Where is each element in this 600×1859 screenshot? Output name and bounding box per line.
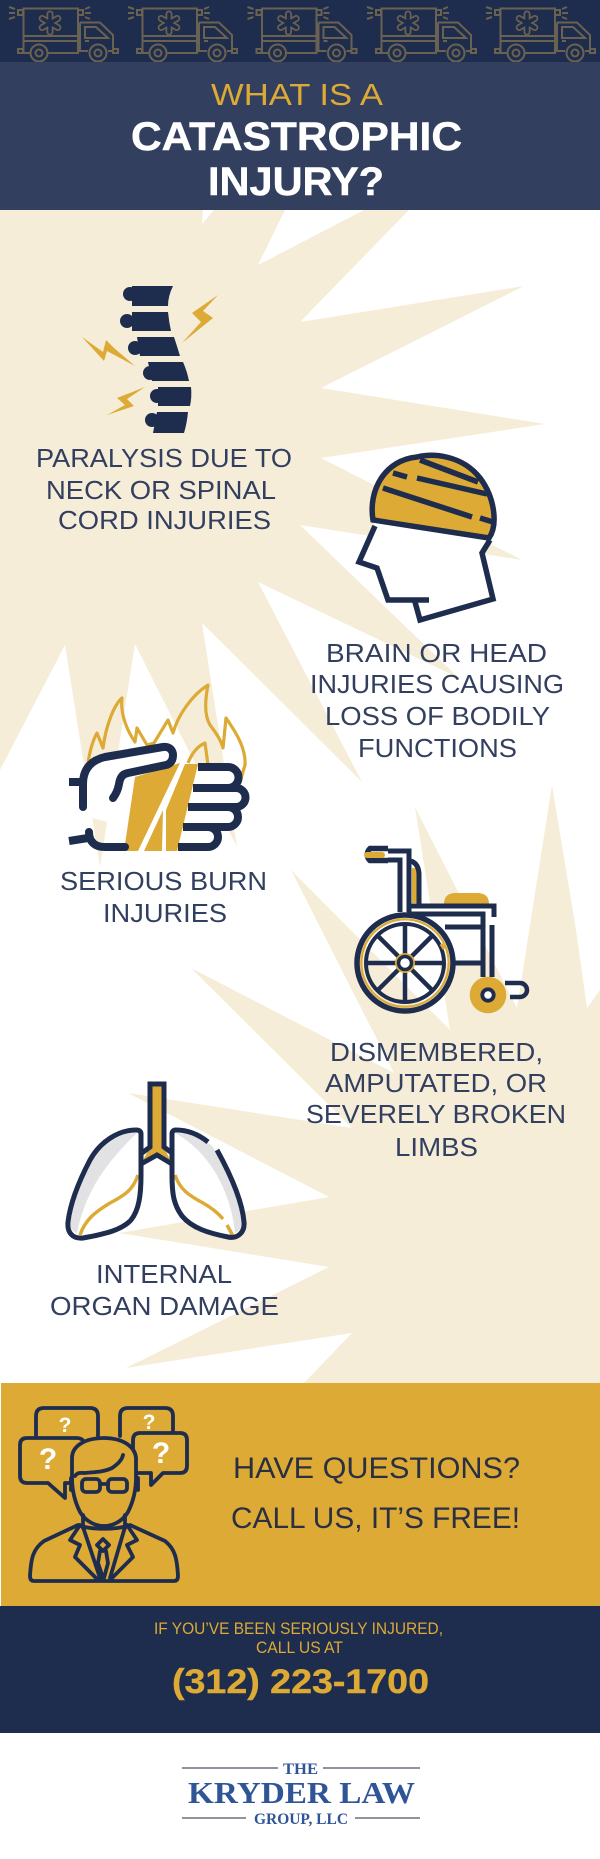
icon: bandaged head: [359, 455, 494, 620]
caster and footrest: [470, 977, 527, 1013]
back bubbles: [36, 1408, 98, 1438]
logo: the kryder law group: KRYDER LAW: [188, 1775, 415, 1810]
injured message: CALL US AT: [256, 1639, 343, 1657]
label: paralysis: CORD INJURIES: [58, 505, 271, 535]
front bubbles: [20, 1438, 84, 1498]
injured message: [154, 1620, 443, 1657]
cta text: [231, 1452, 520, 1535]
logo: the kryder law group: THE: [283, 1761, 318, 1778]
face outline: [359, 526, 493, 620]
label: limbs: [306, 1037, 566, 1162]
label: paralysis: NECK OR SPINAL: [46, 475, 276, 505]
question marks: [39, 1411, 170, 1476]
trachea: [141, 1084, 172, 1164]
icon: spine with lightning bolts: [82, 286, 218, 433]
label: limbs: LIMBS: [395, 1132, 478, 1162]
label: organ damage: INTERNAL: [96, 1259, 232, 1289]
head fill: [359, 520, 493, 620]
header ambulance strip: [0, 0, 600, 62]
vertebrae: [120, 286, 191, 433]
bandage strips: [383, 460, 493, 522]
body: [30, 1525, 178, 1581]
label: burn: SERIOUS BURN: [60, 866, 267, 896]
label: burn: [60, 866, 267, 928]
glasses: [82, 1479, 100, 1492]
backrest padding: [412, 868, 417, 903]
cta text: CALL US, IT’S FREE!: [231, 1502, 520, 1535]
label: paralysis: [36, 443, 292, 535]
white hand fill: [83, 747, 245, 851]
head: [72, 1438, 136, 1526]
background burst: [0, 210, 600, 1383]
question marks: ?: [39, 1443, 57, 1476]
logo: the kryder law group: GROUP, LLC: [254, 1811, 348, 1828]
forearm stripes: [124, 763, 198, 851]
frame: [385, 851, 494, 977]
title: what is a: WHAT IS A: [211, 77, 383, 112]
icon: wheelchair: [357, 848, 527, 1013]
hand outline: [69, 747, 246, 847]
question marks: ?: [59, 1414, 71, 1437]
label: brain or head: FUNCTIONS: [358, 733, 517, 763]
frame panel white fill: [407, 908, 483, 963]
cta text: HAVE QUESTIONS?: [233, 1452, 520, 1485]
label: brain or head: BRAIN OR HEAD: [326, 638, 547, 668]
lung shading: [70, 1133, 242, 1233]
phone number: (312) 223-1700: [172, 1663, 429, 1701]
wheel: [357, 915, 453, 1011]
label: limbs: DISMEMBERED,: [330, 1037, 543, 1067]
label: burn: INJURIES: [103, 898, 227, 928]
lightning bolts: [82, 295, 218, 415]
question marks: ?: [143, 1411, 155, 1434]
label: limbs: SEVERELY BROKEN: [306, 1099, 566, 1129]
panel: questions call to action: [1, 1383, 600, 1606]
panel: phone number: [0, 1606, 600, 1733]
bronchial veins: [80, 1175, 233, 1236]
injured message: IF YOU’VE BEEN SERIOUSLY INJURED,: [154, 1620, 443, 1638]
lung outline: [68, 1130, 244, 1238]
title: catastrophic injury: CATASTROPHIC: [131, 115, 462, 159]
seat cushion: [444, 893, 489, 904]
icon: burning hand: [69, 685, 246, 851]
title panel: [0, 62, 600, 210]
label: brain or head: [310, 638, 564, 763]
label: paralysis: PARALYSIS DUE TO: [36, 443, 292, 473]
title: catastrophic injury: [131, 115, 462, 204]
label: brain or head: LOSS OF BODILY: [325, 701, 550, 731]
label: organ damage: ORGAN DAMAGE: [50, 1291, 279, 1321]
title: catastrophic injury: INJURY?: [208, 160, 384, 204]
lung fill: [68, 1130, 141, 1238]
ambulance icon: [9, 7, 118, 62]
bandage cap: [372, 455, 494, 538]
question marks: ?: [152, 1437, 170, 1470]
flames: [88, 685, 245, 782]
label: brain or head: INJURIES CAUSING: [310, 669, 564, 699]
icon: person with question bubbles: [20, 1408, 187, 1581]
label: limbs: AMPUTATED, OR: [325, 1068, 547, 1098]
handle: [367, 848, 388, 860]
icon: lungs: [68, 1084, 244, 1238]
logo: the kryder law group: [182, 1761, 420, 1828]
label: organ damage: [50, 1259, 279, 1321]
